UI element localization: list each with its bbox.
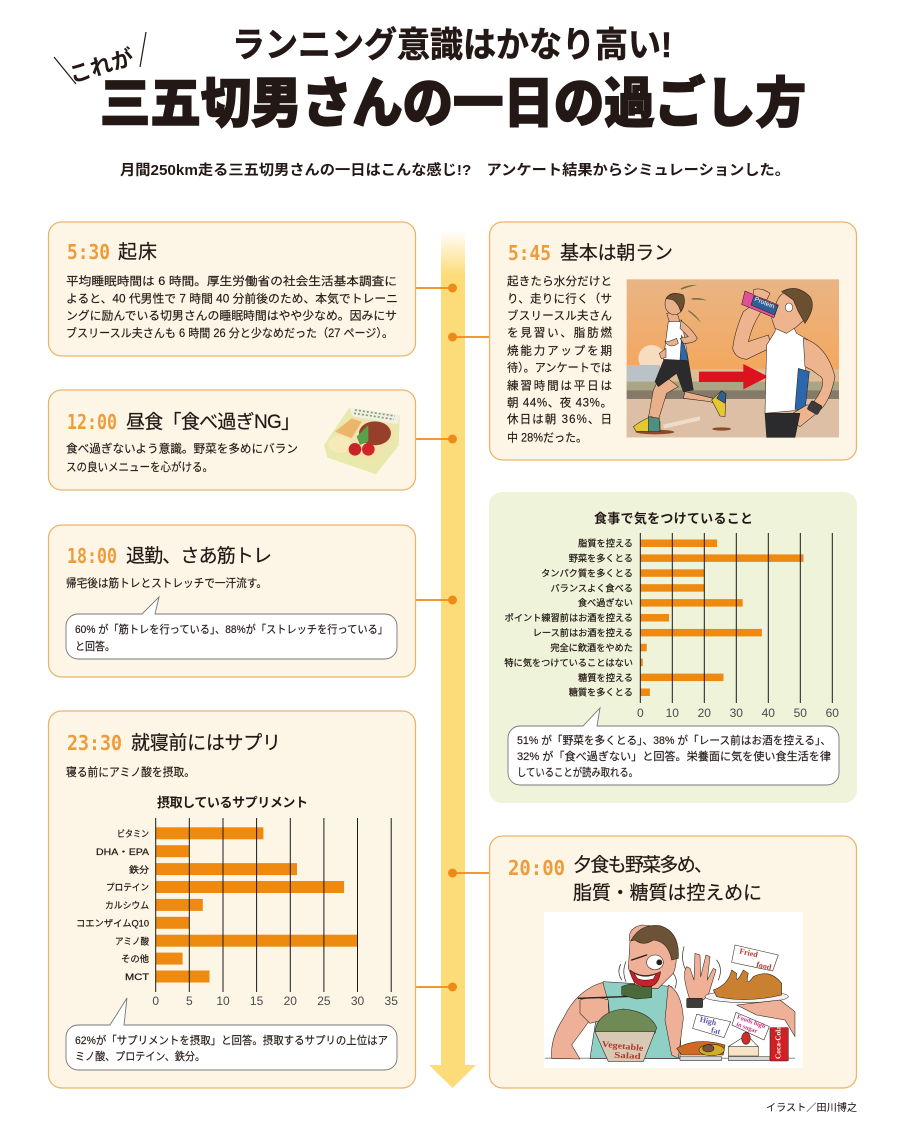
hand: [685, 953, 716, 1000]
time 12:00: 12:00: [67, 410, 117, 434]
axis labels: 0: [152, 994, 159, 1008]
time 23:30: 23:30: [67, 731, 122, 755]
sign labels: fat: [710, 1026, 722, 1036]
axis labels: 25: [317, 994, 331, 1008]
axis labels: 5: [186, 994, 193, 1008]
category labels: その他: [121, 953, 149, 964]
motion lines: [619, 947, 720, 988]
fried food plate: [705, 991, 788, 1003]
sign labels: Foods high: [736, 1014, 767, 1031]
category labels: [76, 829, 150, 982]
heading lunch: 昼食「食べ過ぎNG」: [126, 411, 300, 433]
category labels: コエンザイムQ10: [76, 918, 149, 928]
category labels: MCT: [125, 972, 149, 982]
signs: [732, 945, 778, 971]
category labels: 糖質を控える: [578, 672, 633, 683]
body text: 朝 44%、夜 43%。: [507, 396, 612, 410]
axis labels: 15: [250, 994, 264, 1008]
body text: ブスリースル夫さん: [507, 308, 612, 322]
time 5:30: 5:30: [67, 240, 110, 264]
panel: meal chart: [489, 492, 857, 803]
callout: supplements: ミノ酸、プロテイン、鉄分。: [75, 1049, 205, 1063]
sign labels: [601, 947, 783, 1061]
category labels: カルシウム: [105, 900, 149, 910]
axis labels: [152, 994, 398, 1008]
illustration credit: イラスト／田川博之: [766, 1101, 857, 1114]
heading dinner: 脂質・糖質は控えめに: [573, 882, 762, 904]
callout: training: [66, 597, 397, 659]
heading training: 退勤、さあ筋トレ: [126, 545, 272, 567]
head: [628, 925, 676, 988]
category labels: 完全に飲酒をやめた: [550, 642, 633, 653]
illustration: runner and man drinking protein: [627, 279, 839, 437]
body text: [507, 275, 612, 444]
category labels: 脂質を控える: [578, 538, 633, 548]
category labels: タンパク質を多くとる: [541, 568, 633, 578]
callout: supplements: [66, 998, 397, 1070]
sign labels: food: [756, 960, 773, 972]
body text: [66, 442, 298, 474]
category labels: DHA・EPA: [96, 847, 150, 857]
category labels: 食べ過ぎない: [578, 597, 633, 608]
category labels: 野菜を多くとる: [569, 552, 633, 564]
axis labels: 30: [351, 994, 364, 1008]
axis labels: 20: [284, 994, 297, 1008]
drinking man: [733, 288, 835, 437]
category labels: プロテイン: [106, 882, 149, 892]
callout: training: と回答。: [75, 639, 115, 653]
plates: [677, 1042, 725, 1055]
chart title: 摂取しているサプリメント: [157, 795, 308, 810]
body text: [66, 274, 398, 340]
bars: [640, 540, 804, 696]
chart title: 食事で気をつけていること: [594, 511, 753, 526]
icon: bento box: [324, 408, 400, 474]
connector dots: [415, 284, 489, 992]
axis labels: 20: [698, 706, 711, 720]
heading morning run: 基本は朝ラン: [560, 242, 673, 264]
body text: スの良いメニューを心がける。: [66, 460, 213, 474]
kicker headline: ランニング意識はかなり高い!: [232, 26, 672, 65]
body text: 中 28%だった。: [507, 432, 587, 444]
body text: り、走りに行く（サ: [507, 292, 612, 306]
callout: meals: していることが読み取れる。: [517, 765, 638, 779]
title block: [54, 26, 806, 179]
time 5:45: 5:45: [508, 241, 551, 265]
body text: 練習時間は平日は: [507, 378, 612, 392]
time 18:00: 18:00: [67, 544, 117, 568]
axis labels: [637, 706, 839, 720]
subtitle: 月間250km走る三五切男さんの一日はこんな感じ!? アンケート結果からシミュレーションした。: [120, 161, 790, 179]
sign labels: Salad: [614, 1050, 641, 1061]
heading supplements: 就寝前にはサプリ: [131, 732, 281, 754]
panel: 12:00 lunch: [48, 390, 416, 490]
torso and arms: [590, 982, 681, 1058]
axis labels: 0: [637, 706, 644, 720]
category labels: 鉄分: [129, 864, 149, 875]
salad bowl: [595, 1009, 657, 1033]
callout: meals: 51% が「野菜を多くとる」、38% が「レース前はお酒を控える」、: [517, 733, 831, 747]
body text: 食べ過ぎないよう意識。野菜を多めにバラン: [66, 442, 298, 456]
body text: 焼能力アップを期: [507, 344, 612, 358]
time 20:00: 20:00: [508, 856, 565, 880]
sign labels: in sugar: [735, 1021, 759, 1035]
category labels: アミノ酸: [115, 936, 149, 946]
runner: [633, 293, 726, 432]
axis labels: 60: [826, 706, 839, 720]
tag: これが: これが: [66, 45, 137, 88]
illustration: man eating salad: [544, 912, 803, 1068]
sign labels: Vegetable: [601, 1039, 644, 1053]
body text: を見習い、脂肪燃: [507, 326, 612, 340]
bars: [156, 827, 358, 982]
red arrow: [699, 364, 768, 389]
panel: 23:30 supplements: [48, 711, 416, 1088]
panel: 5:30 wake up: [48, 222, 416, 356]
category labels: バランスよく食べる: [550, 584, 633, 594]
panel: 20:00 dinner: [490, 836, 856, 1088]
category labels: レース前はお酒を控える: [533, 627, 633, 638]
body text: 平均睡眠時間は 6 時間。厚生労働省の社会生活基本調査に: [66, 274, 397, 288]
axis labels: 40: [762, 706, 775, 720]
category labels: [504, 538, 633, 698]
body text: 帰宅後は筋トレとストレッチで一汗流す。: [66, 576, 267, 590]
body text: 待）。アンケートでは: [507, 360, 612, 374]
sign labels: High: [699, 1015, 718, 1028]
category labels: ポイント練習前はお酒を控える: [505, 612, 633, 623]
body text: ブスリースル夫さんも 6 時間 26 分と少なめだった（27 ページ）。: [66, 326, 393, 340]
axis labels: 30: [730, 706, 743, 720]
callout: meals: [508, 708, 839, 785]
sweat drops: [681, 285, 707, 323]
heading dinner: [573, 854, 762, 904]
sign labels: Coca-Cola: [774, 1026, 783, 1059]
callout: meals: 32% が「食べ過ぎない」と回答。栄養面に気を使い食生活を律: [517, 749, 831, 763]
axis labels: 35: [385, 994, 398, 1008]
main title: 三五切男さんの一日の過ごし方: [100, 73, 806, 134]
timeline arrow: [429, 230, 476, 1088]
tag: これが: [54, 32, 146, 88]
body text: よると、40 代男性で 7 時間 40 分前後のため、本気でトレーニ: [66, 292, 398, 306]
drinking man: Protein: [753, 296, 776, 311]
bar chart: meals: [504, 533, 839, 720]
bar chart: supplements: [76, 795, 398, 1008]
axis labels: 10: [666, 706, 679, 720]
panel: 5:45 morning run: [490, 222, 856, 460]
axis labels: 50: [794, 706, 807, 720]
body text: 休日は朝 36%、日: [507, 413, 612, 426]
heading dinner: 夕食も野菜多め、: [573, 854, 713, 876]
callout: supplements: 62%が「サプリメントを摂取」と回答。摂取するサプリの上位はア: [75, 1033, 388, 1047]
category labels: 特に気をつけていることはない: [504, 657, 633, 668]
heading 起床: 起床: [118, 241, 157, 263]
body text: 寝る前にアミノ酸を摂取。: [66, 765, 195, 779]
callout: training: 60% が「筋トレを行っている」、88%が「ストレッチを行っている」: [75, 622, 388, 636]
sign labels: Fried: [739, 947, 759, 960]
category labels: ビタミン: [117, 829, 149, 839]
body text: ングに励んでいる切男さんの睡眠時間はやや少なめ。因みにサ: [66, 308, 397, 322]
category labels: 糖質を多くとる: [569, 686, 633, 698]
axis labels: 10: [216, 994, 230, 1008]
body text: 起きたら水分だけと: [507, 275, 612, 288]
panel: 18:00 training: [48, 525, 416, 677]
